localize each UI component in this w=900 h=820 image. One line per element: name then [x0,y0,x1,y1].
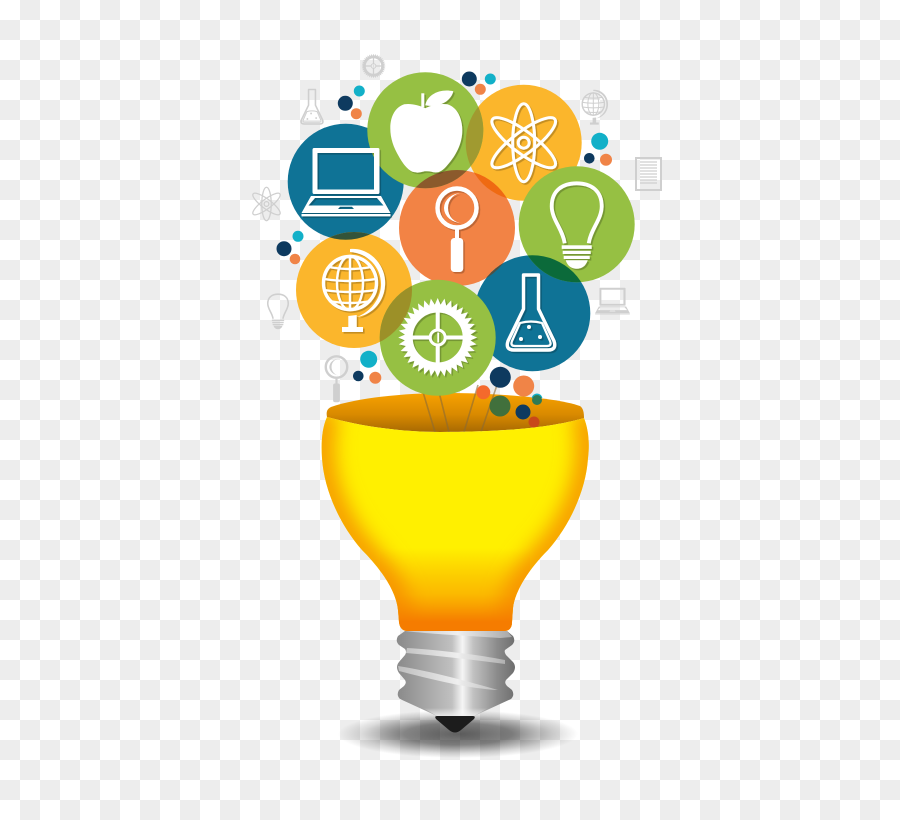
icon: faint flask [301,90,323,124]
bulb glass body [322,417,589,631]
faint background icons [250,53,661,402]
panel: atom circle [466,85,582,201]
icon: faint gear [361,53,386,79]
overlap tints [330,106,581,342]
icon: faint bulb [268,294,288,329]
panel: bulb circle [519,166,635,282]
panel: flask circle [474,255,590,371]
coloured circle cluster [288,72,635,396]
icon: faint magnifier [326,356,347,402]
icon: faint laptop [595,288,630,314]
black contact tip [435,716,475,732]
icon: globe [324,249,385,332]
panel: gear circle [380,280,496,396]
panel: magnifier circle [399,170,515,286]
white circle icons [302,91,602,378]
icon: apple [390,91,462,173]
panel: globe circle [296,232,412,348]
bulb open mouth [327,385,584,432]
icon: atom [486,104,561,182]
icon: laptop [302,148,390,216]
icon: flask [507,275,555,350]
icon: light bulb [552,183,602,269]
panel: laptop circle [288,124,404,240]
icon: faint document [636,158,661,190]
decorative dot clusters [276,72,612,428]
icon: faint globe [582,90,608,125]
panel: apple circle [367,72,483,188]
floor shadow under bulb [338,710,578,758]
icon: faint atom [250,187,283,221]
icon: magnifying glass [438,188,476,272]
metal screw base [397,631,515,716]
icon: gear [397,297,479,378]
